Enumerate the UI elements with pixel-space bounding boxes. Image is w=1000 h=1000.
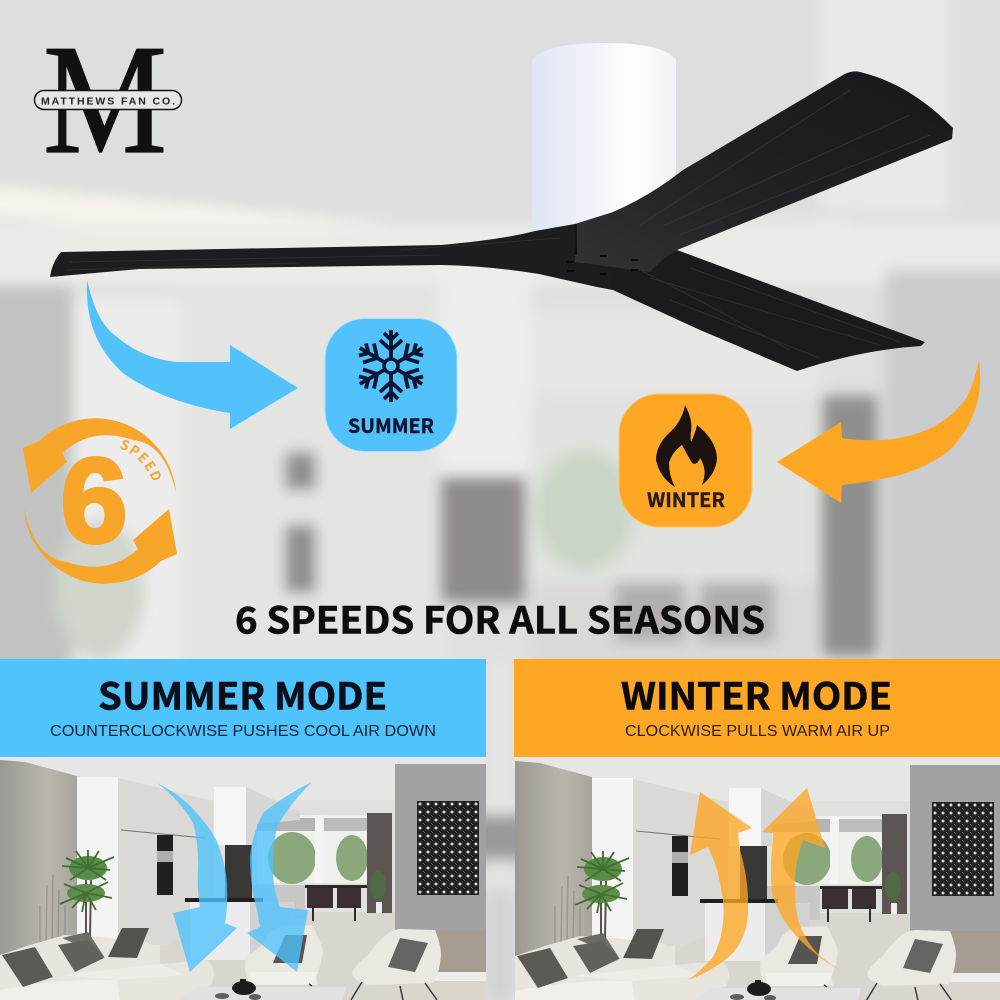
winter header band [514, 659, 1000, 757]
6 speed icon [23, 418, 177, 584]
panel: winter mode [514, 659, 1000, 1000]
airflow arrows: cool air down [157, 782, 312, 972]
subheading: summer: COUNTERCLOCKWISE PUSHES COOL AIR DOWN [50, 723, 436, 740]
left blade [50, 224, 613, 290]
airflow arrows: warm air up [688, 788, 845, 980]
title: 6 SPEEDS FOR ALL SEASONS [235, 590, 765, 644]
room photo: winter [515, 758, 1000, 1000]
arrow: summer blue [87, 280, 298, 429]
panel: summer mode [0, 659, 486, 1000]
upper circular arrow [23, 418, 176, 493]
room photo: summer [0, 757, 486, 1000]
arrow: winter orange [777, 360, 980, 503]
heading: summer mode: SUMMER MODE [98, 666, 387, 720]
subheading: winter: CLOCKWISE PULLS WARM AIR UP [625, 723, 890, 740]
summer header band [0, 659, 486, 757]
logo: Matthews Fan Co.: M [43, 12, 167, 186]
lower right blade [560, 240, 925, 371]
ceiling fan [50, 43, 953, 371]
curved label: speed: SPEED [120, 440, 161, 480]
label: winter: WINTER [647, 484, 725, 513]
lower circular arrow [24, 509, 177, 584]
mounting holes [567, 255, 638, 275]
fan canopy [532, 43, 676, 228]
heading: winter mode: WINTER MODE [621, 666, 892, 720]
summer badge [325, 318, 457, 452]
winter badge [619, 394, 752, 527]
upper right blade [575, 71, 953, 272]
icon: snowflake [354, 330, 428, 402]
logo: Matthews Fan Co.: MATTHEWS FAN CO. [41, 96, 175, 108]
numeral 6: 6 [61, 434, 127, 568]
label: summer: SUMMER [348, 410, 434, 439]
icon: flame [656, 405, 717, 487]
